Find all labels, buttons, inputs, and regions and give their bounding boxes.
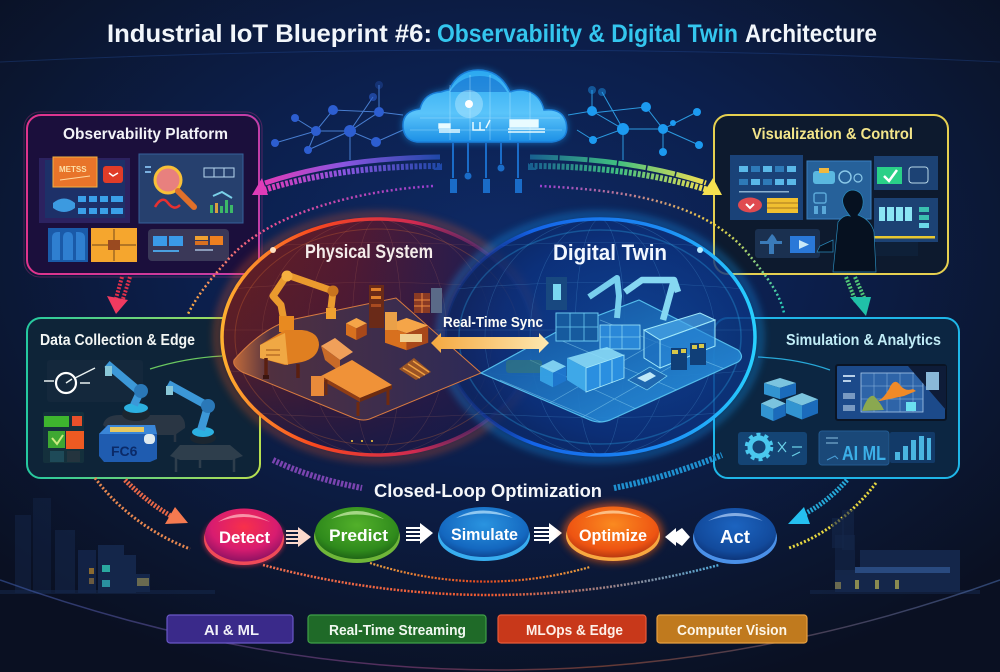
metrics dashboard: METSS (59, 165, 87, 174)
tag: MLOps and edge: MLOps & Edge (526, 622, 623, 639)
left digital block (540, 360, 566, 387)
orange robot arm (273, 270, 338, 332)
simulation heading: Simulation & Analytics (786, 332, 941, 349)
tag: computer vision (657, 615, 807, 643)
AI ML card (819, 431, 889, 465)
lower dotted arc outer (263, 565, 719, 595)
panel: data collection and edge (27, 318, 260, 478)
status card (148, 229, 229, 261)
lower dotted arc inner (370, 563, 590, 582)
skyline left (0, 498, 215, 594)
tag: real-time streaming: Real-Time Streaming (329, 622, 466, 639)
network: right constellation (568, 86, 703, 160)
tag: AI and ML: AI & ML (204, 622, 259, 639)
arrow: visualization to simulation (846, 277, 871, 316)
edge gateway box (99, 425, 157, 462)
top arc arrow: cloud to observability platform (252, 157, 442, 195)
node: act (693, 508, 777, 564)
node: optimize (563, 503, 663, 563)
dotted arc left (188, 186, 433, 314)
server cabinet (369, 285, 384, 328)
yellow circuit tile (91, 228, 137, 262)
robot arm two (166, 384, 243, 472)
stepped loader (399, 358, 431, 380)
dim conveyor on the left (506, 360, 542, 373)
operator silhouette (817, 190, 876, 272)
title: Observability & Digital Twin (437, 20, 738, 48)
small machine (346, 318, 367, 340)
data collection heading: Data Collection & Edge (40, 332, 195, 349)
dotted arc into detect (95, 478, 190, 549)
node: predict (314, 507, 400, 563)
physical factory machines (260, 270, 442, 416)
physical floor platform (234, 298, 481, 420)
blue tile (48, 228, 88, 262)
panel: visualization and control (714, 115, 948, 274)
physical system heading: Physical System (305, 242, 433, 263)
grid dashboard (730, 155, 803, 220)
digital twin heading: Digital Twin (553, 240, 667, 265)
arrow: simulation to act (788, 480, 847, 524)
node: simulate: Simulate (451, 525, 518, 544)
dark tower (546, 277, 567, 310)
node: detect: Detect (219, 528, 270, 547)
panel: simulation and analytics (714, 318, 959, 478)
center dashboard (807, 161, 871, 219)
cloud connectors (450, 143, 522, 193)
arrow: predict to simulate (406, 523, 433, 544)
link curve (758, 357, 830, 370)
dotted arc into act (789, 483, 876, 548)
arc from physical to loop (273, 460, 362, 488)
real-time sync label: Real-Time Sync (443, 315, 543, 331)
tag: computer vision: Computer Vision (677, 622, 787, 639)
arrow: data collection to detect (125, 480, 188, 524)
arc from digital to loop (614, 455, 722, 488)
node: simulate (438, 507, 530, 561)
observability heading: Observability Platform (63, 126, 228, 143)
node: act: Act (720, 527, 750, 547)
title: Industrial IoT Blueprint #6: (107, 20, 432, 48)
dotted arc right (540, 186, 784, 313)
metrics dashboard (39, 157, 130, 223)
tag: AI and ML (167, 615, 293, 643)
big wire frame box (644, 313, 715, 368)
tag: MLOps and edge (498, 615, 646, 643)
check dashboard (874, 156, 938, 190)
arrow: observability to data collection (107, 277, 130, 314)
AI ML card: AI ML (842, 443, 886, 465)
digital twin machines (506, 277, 715, 392)
gear card (738, 432, 807, 465)
analysis dashboard with magnifier (139, 154, 243, 223)
bars card (890, 432, 935, 463)
tag: real-time streaming (308, 615, 486, 643)
robot arm one (103, 364, 185, 442)
top arc arrow: cloud to visualization (528, 157, 722, 195)
tank machine (260, 330, 319, 379)
arrow: act to optimize (665, 528, 690, 546)
arrow: detect to predict (286, 527, 311, 547)
cloud (403, 70, 567, 142)
data cubes (761, 378, 818, 421)
green and orange status tiles (43, 412, 84, 463)
big lower arc (0, 580, 1000, 670)
digital twin lens (440, 215, 760, 459)
node: detect (203, 508, 285, 566)
left digital robot (589, 278, 619, 318)
large orange machine (385, 312, 428, 350)
digital cabin (567, 347, 624, 392)
panel: observability platform (24, 112, 262, 277)
mid blocks (600, 325, 640, 349)
shelving unit (556, 313, 598, 341)
monitor base (876, 242, 918, 256)
wall panels (414, 288, 442, 313)
small table (321, 338, 353, 372)
skyline right (810, 510, 980, 594)
visualization heading: Visualization & Control (752, 126, 913, 143)
low conveyor (628, 367, 667, 390)
node: optimize: Optimize (579, 526, 647, 545)
edge gateway box: FC6 (111, 443, 138, 459)
yellow and blue columns (671, 343, 706, 370)
analytics chart (836, 365, 946, 420)
closed-loop heading: Closed-Loop Optimization (374, 481, 602, 501)
digital floor platform (481, 300, 745, 430)
gauge card (44, 360, 143, 402)
link curve (150, 356, 222, 369)
physical system lens (217, 215, 537, 459)
chart dashboard (874, 198, 938, 242)
real-time sync double arrow (431, 333, 549, 353)
node: predict: Predict (329, 526, 388, 545)
arrow: simulate to optimize (534, 523, 562, 544)
title: Architecture (745, 20, 877, 48)
right digital robot (625, 280, 678, 320)
network: left constellation (271, 81, 403, 160)
big table (311, 360, 392, 416)
play card (755, 229, 820, 258)
